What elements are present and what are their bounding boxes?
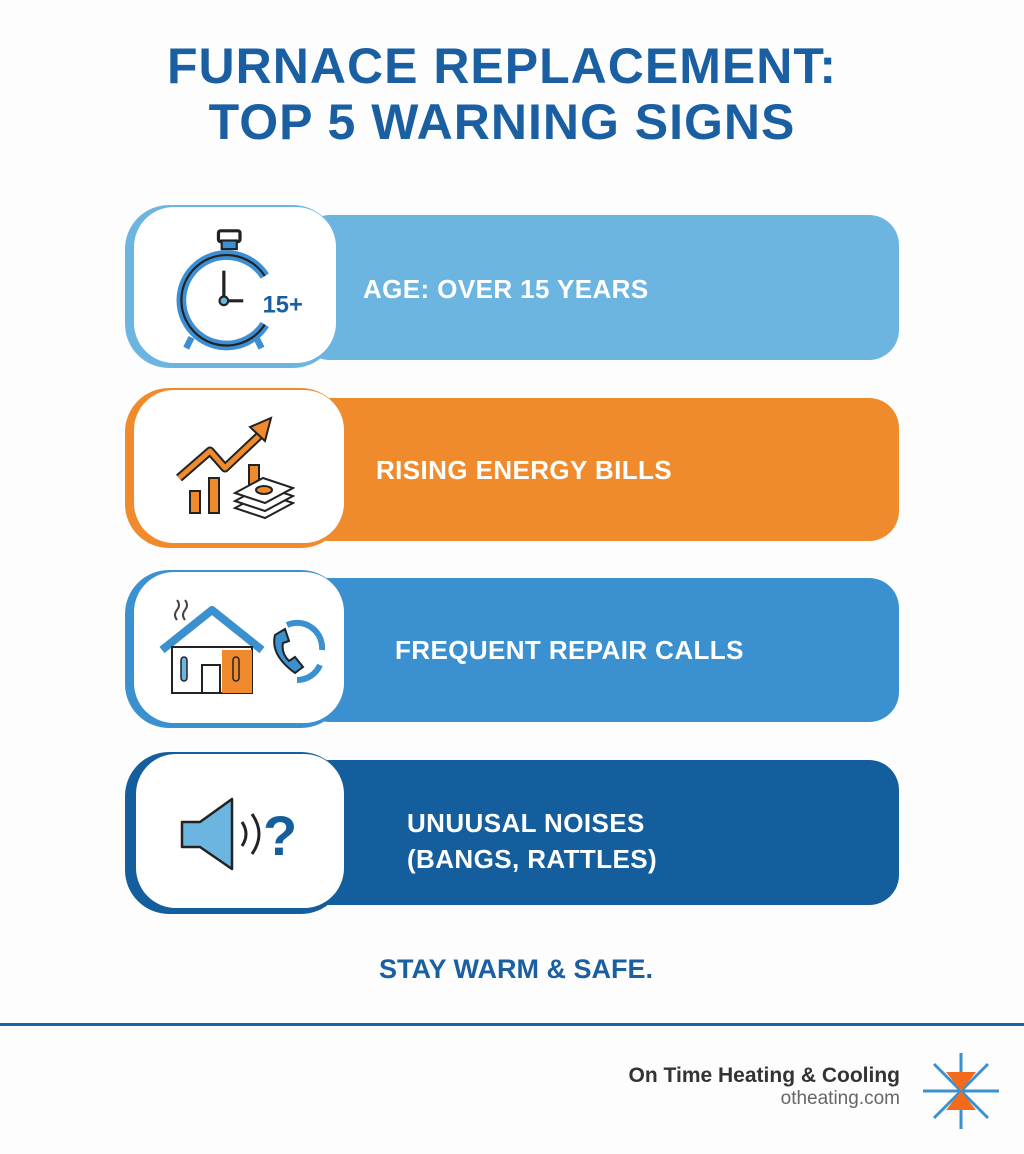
label: noises: (BANGS, RATTLES) — [407, 844, 657, 874]
panel: repairs — [125, 570, 899, 728]
footer brand: On Time Heating & Cooling — [629, 1064, 900, 1087]
icon: speaker question: ? — [263, 804, 297, 867]
tagline: STAY WARM & SAFE. — [379, 954, 653, 984]
label: noises — [407, 808, 657, 874]
icon: stopwatch — [176, 229, 303, 350]
panel: noises — [125, 752, 899, 914]
label: repairs: FREQUENT REPAIR CALLS — [395, 635, 744, 665]
icon: speaker question — [180, 798, 297, 870]
footer brand: otheating.com — [781, 1088, 900, 1109]
icon: house and phone — [160, 599, 326, 694]
title — [167, 38, 837, 150]
panel: age — [125, 205, 899, 368]
label: age: AGE: OVER 15 YEARS — [363, 274, 649, 304]
icon: logo snowflake — [923, 1053, 999, 1129]
icon: rising chart and money — [176, 416, 295, 520]
title: TOP 5 WARNING SIGNS — [209, 94, 795, 150]
icon: stopwatch: 15+ — [263, 293, 303, 319]
label: bills: RISING ENERGY BILLS — [376, 455, 672, 485]
label: noises: UNUUSAL NOISES — [407, 808, 645, 838]
title: FURNACE REPLACEMENT: — [167, 38, 837, 94]
panel: bills — [125, 388, 899, 548]
footer brand — [629, 1064, 900, 1109]
